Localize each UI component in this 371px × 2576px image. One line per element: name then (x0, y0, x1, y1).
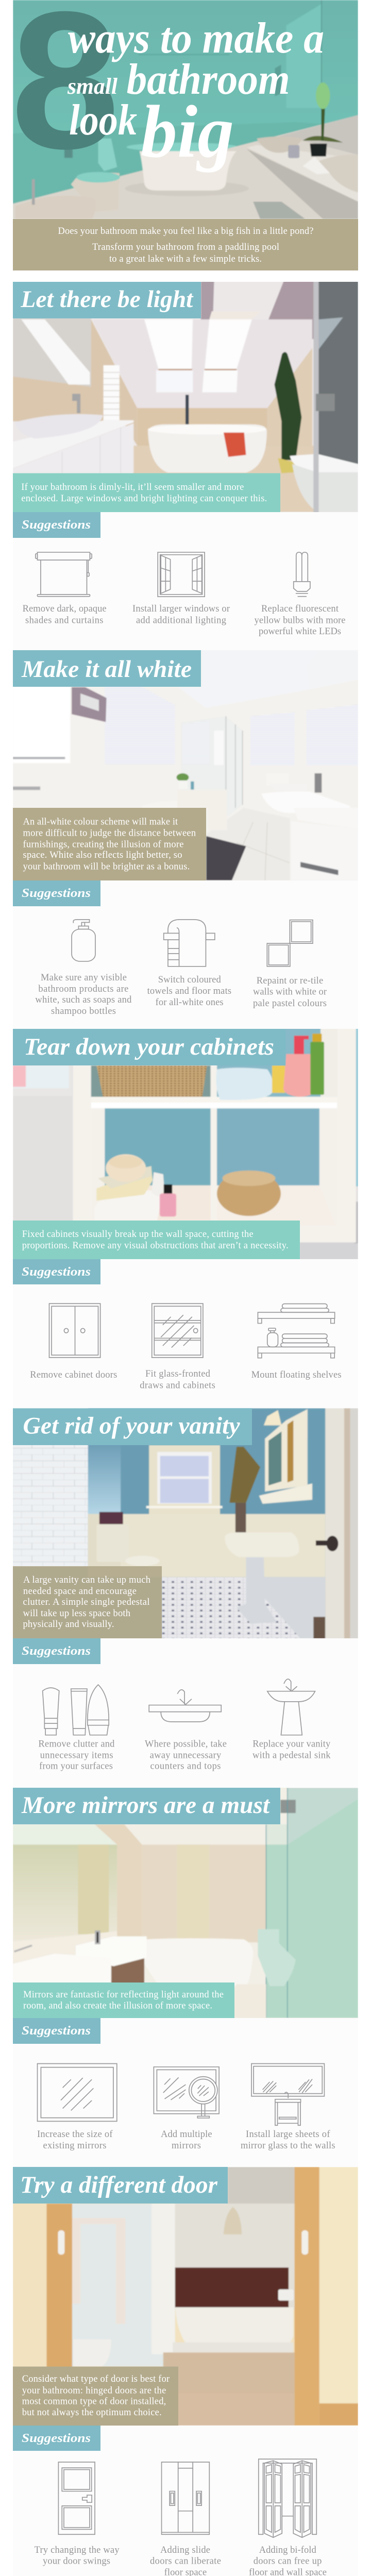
suggestions label: Suggestions (22, 887, 91, 900)
suggestion text: glass (140, 1369, 215, 1391)
heading (13, 1409, 252, 1445)
caption (13, 2367, 178, 2426)
suggestion text: size: Increase the size of (37, 2129, 113, 2140)
caption: clutter. A simple single pedestal (23, 1597, 149, 1607)
hero title: big (141, 91, 234, 173)
icon: bi-fold doors (259, 2459, 316, 2537)
suggestion text: slide: Adding slide (160, 2545, 210, 2555)
suggestion text: sheets: mirror glass to the walls (241, 2141, 335, 2151)
suggestion text: multiple: Add multiple (161, 2129, 212, 2140)
suggestion text: walls: Repaint or re-tile (257, 976, 323, 986)
suggestions label: Suggestions (22, 1265, 91, 1279)
caption (13, 1982, 234, 2018)
panel: make it all white (13, 649, 358, 1016)
caption: physically and visually. (23, 1619, 114, 1630)
caption: If your bathroom is dimly-lit, it’ll seem smaller and more (21, 482, 244, 493)
suggestion text: counters: away unnecessary (150, 1751, 222, 1761)
panel: more mirrors are a must (13, 1787, 358, 2151)
heading: Try a different door (20, 2172, 218, 2198)
icon: glass cabinet (152, 1303, 203, 1358)
caption (13, 808, 206, 880)
suggestion text: counters: counters and tops (150, 1761, 221, 1771)
icon: counter sink (149, 1690, 221, 1722)
photo: blue bathroom (13, 1408, 358, 1639)
icon: multiple mirrors (154, 2067, 219, 2118)
caption (13, 1566, 162, 1638)
suggestions label (13, 2426, 100, 2451)
caption: A large vanity can take up much (23, 1575, 150, 1585)
suggestion text: windows: add additional lighting (136, 615, 226, 625)
suggestion text: glass: draws and cabinets (140, 1381, 215, 1391)
icon: light bulb (294, 552, 310, 597)
suggestion text: counters (145, 1739, 227, 1771)
icon: floating shelves (258, 1304, 335, 1358)
suggestion text: products: shampoo bottles (51, 1006, 116, 1016)
hero title: small (67, 74, 118, 99)
icon: pedestal sink (267, 1679, 315, 1735)
suggestion text: swing: Try changing the way (35, 2545, 120, 2555)
suggestion text: glass: Fit glass-fronted (145, 1369, 211, 1379)
suggestion text: towels (147, 975, 231, 1008)
suggestion text: windows: Install larger windows or (132, 604, 230, 614)
heading: Tear down your cabinets (24, 1033, 274, 1060)
suggestions label (13, 1259, 100, 1284)
suggestion text: walls (253, 976, 327, 1009)
suggestion text: slide: doors can liberate (150, 2556, 221, 2567)
photo: sliding door bathroom (13, 2167, 358, 2426)
panel: tear down your cabinets (13, 1027, 358, 1391)
hero title (67, 14, 324, 173)
caption: space. White also reflects light better, so (23, 850, 182, 860)
caption: needed space and encourage (23, 1586, 137, 1597)
suggestion text: products: white, such as soaps and (35, 995, 132, 1005)
suggestion text: bulbs: powerful white LEDs (259, 626, 341, 637)
suggestions label: Suggestions (22, 1645, 91, 1658)
caption: your bathroom: hinged doors are the (22, 2385, 166, 2396)
suggestions label: Suggestions (22, 518, 91, 532)
heading: Get rid of your vanity (23, 1413, 240, 1439)
heading: Let there be light (20, 286, 194, 313)
caption: but not always the optimum choice. (22, 2408, 162, 2418)
suggestion text: bi-fold (249, 2545, 327, 2576)
suggestion text: windows (132, 604, 230, 625)
intro band: Transform your bathroom from a paddling pool (92, 242, 279, 252)
suggestion text: doors: Remove cabinet doors (30, 1370, 117, 1380)
icon: roller blind (36, 552, 92, 597)
suggestion text: bi-fold: Adding bi-fold (259, 2545, 316, 2555)
hero title: ways to make a (68, 14, 324, 62)
caption: will take up less space both (23, 1608, 130, 1619)
heading (13, 1788, 280, 1824)
intro band: Does your bathroom make you feel like a big fish in a little pond? (58, 226, 313, 236)
suggestion text: pedestal: Replace your vanity (252, 1739, 331, 1750)
heading (13, 2167, 228, 2204)
suggestion text: walls: walls with white or (253, 987, 327, 997)
suggestion text: clutter: unnecessary items (40, 1751, 113, 1761)
icon: soap bottle (72, 920, 95, 961)
suggestions label (13, 880, 100, 906)
suggestion text: towels: towels and floor mats (147, 986, 231, 996)
suggestion text: sheets: Install large sheets of (246, 2129, 330, 2140)
caption: your bathroom will be brighter as a bonus. (23, 861, 190, 872)
suggestion text: slide (150, 2545, 221, 2576)
heading (13, 1029, 285, 1065)
suggestion text: multiple: mirrors (172, 2141, 201, 2151)
suggestion text: walls: pale pastel colours (253, 998, 327, 1009)
photo: mirrored bathroom (13, 1787, 358, 2019)
icon: towel rail (164, 920, 215, 967)
suggestion text: products: bathroom products are (38, 984, 128, 994)
suggestions label (13, 1638, 100, 1664)
icon: mirror glass wall (251, 2063, 324, 2125)
caption (13, 473, 280, 512)
suggestion text: sheets (241, 2129, 335, 2151)
icon: cabinet doors (49, 1303, 100, 1358)
icon: wall tiles (267, 920, 313, 967)
suggestion text: swing (35, 2545, 120, 2567)
suggestion text: bi-fold: doors can free up (254, 2556, 322, 2567)
suggestions label: Suggestions (22, 2432, 91, 2445)
suggestions label (13, 512, 100, 538)
caption: Mirrors are fantastic for reflecting light around the (23, 1990, 224, 2000)
heading (13, 650, 201, 687)
panel: try a different door (13, 2167, 358, 2576)
icon: bottles (43, 1685, 109, 1735)
icon: panel door (58, 2462, 95, 2534)
photo: skylight bathroom (13, 281, 358, 513)
icon: window (158, 552, 205, 597)
suggestion text: size: existing mirrors (43, 2141, 106, 2151)
photo: white bathroom (13, 649, 358, 882)
caption: more difficult to judge the distance between (23, 828, 196, 839)
hero panel (11, 0, 358, 270)
panel: let there be light (13, 281, 358, 637)
suggestion text: clutter (38, 1739, 115, 1771)
suggestion text: blinds: shades and curtains (25, 615, 103, 625)
icon: large mirror (38, 2063, 117, 2121)
caption: furnishings, creating the illusion of more (23, 839, 183, 850)
caption: Consider what type of door is best for (22, 2374, 170, 2384)
panel: get rid of your vanity (13, 1408, 358, 1771)
hero title: bathroom (127, 55, 290, 104)
caption: enclosed. Large windows and bright lighting can conquer this. (21, 494, 267, 504)
caption: proportions. Remove any visual obstructions that aren’t a necessity. (22, 1241, 289, 1251)
suggestion text: products (35, 973, 132, 1016)
suggestion text: products: Make sure any visible (41, 973, 127, 983)
suggestion text: pedestal: with a pedestal sink (252, 1751, 331, 1761)
caption: Fixed cabinets visually break up the wall space, cutting the (22, 1229, 254, 1240)
caption: room, and also create the illusion of more space. (23, 2001, 212, 2011)
suggestion text: towels: for all-white ones (156, 997, 224, 1008)
suggestion text: pedestal (252, 1739, 331, 1761)
heading (13, 282, 201, 318)
photo: open shelving (13, 1027, 358, 1260)
hero title: look (69, 96, 137, 144)
suggestion text: bulbs (255, 604, 345, 637)
heading: More mirrors are a must (21, 1792, 271, 1819)
suggestion text: blinds: Remove dark, opaque (23, 604, 107, 614)
intro band: to a great lake with a few simple tricks. (109, 254, 262, 264)
suggestion text: clutter: Remove clutter and (38, 1739, 115, 1750)
suggestion text: clutter: from your surfaces (39, 1761, 113, 1771)
caption (13, 1221, 300, 1259)
suggestion text: counters: Where possible, take (145, 1739, 227, 1750)
suggestion text: swing: your door swings (43, 2556, 110, 2567)
intro band (13, 219, 358, 270)
suggestion text: blinds (23, 604, 107, 625)
suggestion text: bulbs: Replace fluorescent (261, 604, 339, 614)
suggestion text: multiple (161, 2129, 212, 2151)
hero photo (13, 0, 358, 219)
suggestion text: shelves: Mount floating shelves (251, 1370, 342, 1380)
suggestion text: size (37, 2129, 113, 2151)
caption: An all-white colour scheme will make it (23, 817, 178, 827)
icon: sliding doors (162, 2462, 209, 2534)
suggestion text: towels: Switch coloured (158, 975, 221, 985)
suggestion text: bulbs: yellow bulbs with more (255, 615, 345, 625)
suggestions label (13, 2018, 100, 2044)
caption: most common type of door installed, (22, 2397, 166, 2407)
suggestions label: Suggestions (22, 2024, 91, 2038)
panel background (13, 512, 358, 2576)
heading: Make it all white (21, 656, 192, 683)
